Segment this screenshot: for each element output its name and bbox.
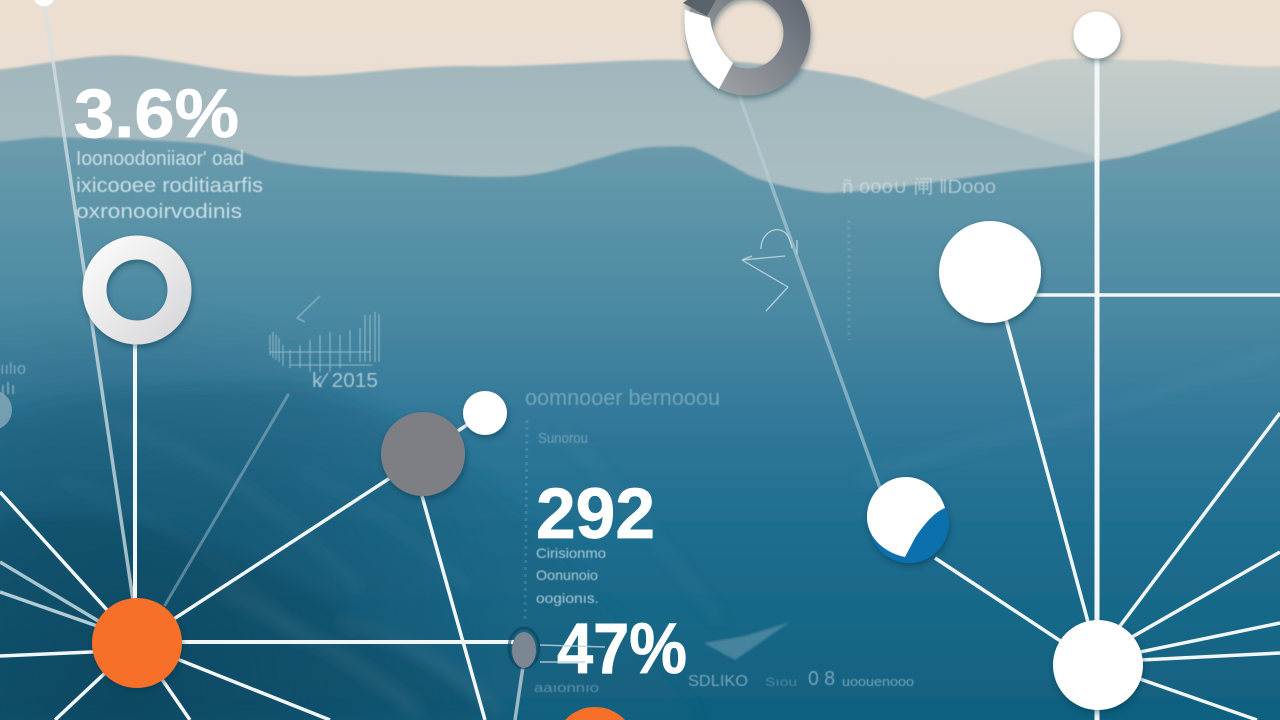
- donut chart: top: [683, 0, 797, 89]
- bottom label: Sıou: [765, 675, 797, 689]
- white node: top right: [1074, 12, 1120, 58]
- description text: 3.6%: Ioonoodoniiaor' oad: [76, 148, 244, 170]
- left edge text: ılı: [0, 379, 16, 398]
- faded label under 47%: aaıonnıo: [534, 680, 599, 695]
- stat: 3.6%: [74, 75, 263, 223]
- faded label: centre: oomnooer bernooou: [525, 385, 720, 410]
- description text: 292: oogionıs.: [536, 590, 599, 606]
- small white node: [463, 391, 507, 435]
- bottom label: 0 8: [808, 668, 835, 690]
- lake reflection: [704, 622, 790, 660]
- description text: 3.6%: oxronooirvodinis: [76, 201, 242, 223]
- lower dark forest slopes: [0, 350, 1280, 720]
- orange hub: left: [92, 598, 182, 688]
- lines crossing 47%: [540, 645, 605, 662]
- stat: 292: 292: [536, 475, 655, 554]
- bottom label: SDLIKO: [688, 673, 748, 690]
- small bar chart sketch: [270, 296, 379, 372]
- faded label: upper middle: ñ ooo∪ 闸 ‖Dooo: [842, 176, 996, 198]
- left edge text: ıılıo: [0, 359, 26, 378]
- description text: 3.6%: [76, 148, 263, 223]
- white node: right large: [939, 221, 1041, 323]
- small chart label: k⁄ 2015: [312, 370, 378, 392]
- icon: white ring: [94, 248, 180, 332]
- stat: 3.6%: 3.6%: [74, 75, 239, 152]
- pie node: right: [867, 477, 949, 563]
- left edge text: [0, 359, 26, 398]
- orange node: bottom: [565, 707, 625, 720]
- faded label: centre: Sunorou: [538, 430, 588, 447]
- grey node: [381, 412, 465, 496]
- bottom label: uoouenooo: [842, 674, 914, 689]
- faded dotted vertical lines: [525, 220, 849, 620]
- left edge partial circle: [0, 390, 12, 430]
- bottom label: [688, 668, 914, 690]
- network lines: left hub: [0, 342, 525, 720]
- faded label: centre: [525, 385, 720, 447]
- white hub: bottom right: [1053, 620, 1143, 710]
- faint connector lines: [44, 0, 880, 605]
- node: top-left partial: [34, 0, 54, 6]
- network lines: right hub: [935, 35, 1280, 720]
- description text: 292: Oonunoio: [536, 567, 598, 583]
- small sketch icon: [742, 230, 797, 311]
- stat: 292: [536, 475, 655, 606]
- description text: 3.6%: ixicooee roditiaarfis: [76, 175, 263, 197]
- small oval node: [509, 628, 539, 668]
- stat: 47%: 47%: [557, 610, 687, 689]
- description text: 292: Cirisionmo: [536, 545, 606, 561]
- description text: 292: [536, 545, 606, 606]
